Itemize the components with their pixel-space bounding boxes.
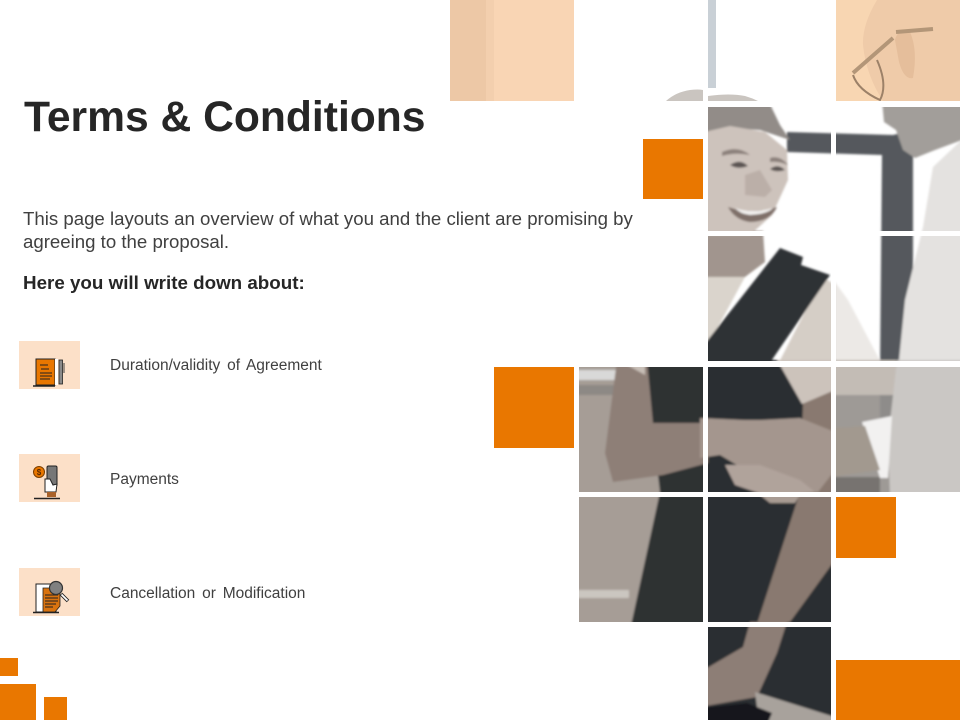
man's shirt lower [888, 360, 960, 495]
photo tile: peach man's head [836, 0, 960, 101]
orange square: bottom left large [0, 684, 36, 720]
left arm [605, 360, 708, 482]
cuff [862, 416, 892, 478]
orange square: right [836, 497, 896, 558]
handshake [700, 418, 835, 492]
photo tile: top window and hair [666, 0, 758, 101]
intro text: agreeing to the proposal. [23, 231, 229, 252]
icon: hand with payment device: $ [37, 468, 42, 477]
subheading: Here you will write down about: [23, 272, 305, 293]
table [755, 692, 835, 720]
sleeve in tile [777, 360, 835, 404]
woman's hair [708, 107, 790, 140]
icon: hand with payment device [19, 454, 80, 502]
black strap [708, 246, 831, 361]
item label: duration: Duration/validity of Agreement [110, 357, 322, 374]
orange square: bottom left small [0, 658, 18, 676]
right arm [756, 391, 831, 622]
woman's shirt [708, 276, 745, 342]
woman's face [708, 125, 789, 231]
phone [700, 703, 772, 720]
orange square: mid [494, 367, 574, 448]
title: Terms & Conditions [24, 93, 426, 141]
man's head [882, 100, 960, 158]
orange block: bottom right [836, 660, 960, 720]
intro text: This page layouts an overview of what you and the client are promising by [23, 208, 633, 229]
icon: agreement document and pen [19, 341, 80, 389]
photo tile: peach wall [450, 0, 574, 101]
photo: clipped people scene [570, 100, 960, 720]
right tile backdrop [836, 360, 898, 492]
woman's neck [700, 231, 765, 277]
item label: cancellation: Cancellation or Modification [110, 585, 305, 602]
intro text [23, 208, 633, 252]
orange square: upper [643, 139, 703, 199]
window frame [787, 130, 913, 370]
item label: payments: Payments [110, 471, 179, 488]
man's shirt [898, 132, 960, 370]
orange square: bottom left medium [44, 697, 67, 720]
dress [630, 360, 705, 630]
photo mosaic: handshake [450, 0, 960, 720]
lower left tile backdrop [579, 367, 661, 622]
sleeve [836, 283, 879, 360]
lower hand [700, 622, 787, 707]
icon: document with magnifier [19, 568, 80, 616]
man's arm [862, 425, 881, 472]
